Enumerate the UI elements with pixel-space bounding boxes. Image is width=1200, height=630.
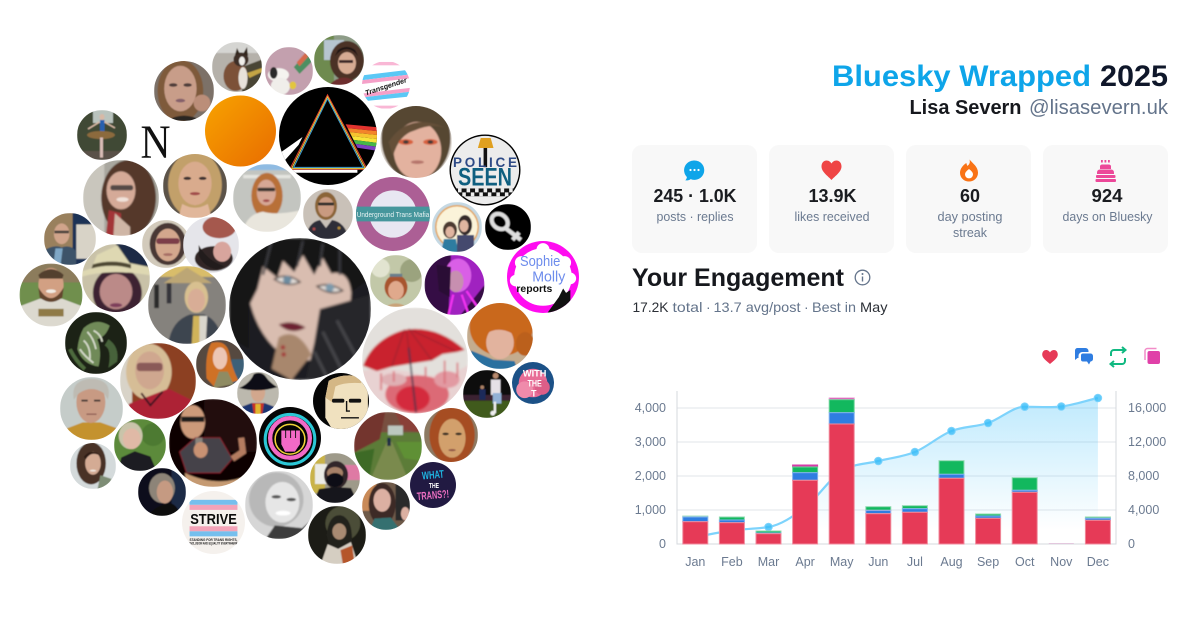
stat card: days on Bluesky: 924 — [1092, 186, 1122, 206]
legend icon: quotes — [1145, 348, 1160, 364]
icon: heart — [822, 160, 842, 180]
engagement summary: 13.7 avg/post — [714, 299, 801, 315]
left axis labels: 0 — [659, 537, 666, 551]
avatar: with the T logo: THE — [528, 378, 542, 388]
title: 2025 — [1100, 60, 1168, 93]
avatar: with the T logo: WITH — [523, 369, 546, 379]
avatar: transgender logo: Transgender — [364, 75, 409, 97]
avatar: red umbrella watercolor — [362, 308, 468, 414]
month labels: May — [830, 555, 854, 569]
avatar: sophie molly reports: Sophie — [520, 254, 560, 270]
avatar: woman red glasses — [142, 220, 190, 268]
avatar: strive logo: STANDING FOR TRANS RIGHTS, — [190, 538, 238, 542]
legend icon: replies — [1075, 348, 1093, 364]
avatar: sophie molly reports: reports — [516, 284, 553, 295]
avatar: man with glasses cartoon — [313, 373, 369, 429]
month labels: Aug — [940, 555, 963, 569]
right axis labels: 12,000 — [1128, 435, 1166, 449]
stat card: day posting streak — [906, 145, 1031, 253]
avatar: red hair outdoors — [370, 255, 423, 307]
right axis labels: 4,000 — [1128, 503, 1159, 517]
avatar: fist logo — [259, 407, 321, 469]
profile name and handle: Lisa Severn — [910, 97, 1022, 119]
left axis labels: 1,000 — [635, 503, 666, 517]
cumulative area — [695, 398, 1098, 544]
month labels: Jan — [685, 555, 705, 569]
bar: Mar — [756, 531, 781, 544]
avatar: purple portrait — [424, 255, 484, 315]
avatar: with the T logo — [512, 362, 554, 404]
avatar: blonde with greenery — [114, 419, 166, 471]
avatar: sophie molly reports: Molly — [532, 269, 566, 285]
avatar: man with newspaper — [44, 213, 96, 265]
avatar: lizard — [65, 312, 127, 374]
avatar: brown hair woman — [70, 442, 116, 489]
avatar: black and white portrait — [245, 471, 313, 539]
left axis labels: 2,000 — [635, 469, 666, 483]
chart legend — [1042, 347, 1160, 367]
avatar: N logo — [129, 116, 181, 169]
avatar: cat — [212, 42, 262, 92]
avatar: main profile woman with black fringe — [229, 238, 371, 380]
avatar: underground roundel: Underground Trans Mafia — [357, 210, 430, 219]
stat card: posts and replies: posts · replies — [656, 209, 734, 224]
right axis labels — [1128, 401, 1166, 551]
cumulative line — [695, 398, 1098, 537]
legend icon: reposts — [1110, 347, 1126, 367]
bar: May — [829, 398, 854, 544]
avatar: prism — [279, 87, 377, 185]
profile name and handle: @lisasevern.uk — [1029, 97, 1169, 119]
avatar: with the T logo: T — [531, 388, 537, 398]
month labels: Mar — [758, 555, 779, 569]
stat card: days on Bluesky — [1043, 145, 1168, 253]
avatar: what the trans logo — [410, 462, 456, 508]
avatar: two illustrated women — [432, 202, 482, 252]
line markers — [765, 394, 1102, 531]
legend icon: likes — [1042, 350, 1058, 364]
icon: info — [855, 270, 870, 285]
stat card: likes received: likes received — [794, 209, 870, 224]
avatar: older man — [60, 377, 123, 440]
avatar: sophie molly reports — [507, 241, 579, 313]
bar: Nov — [1049, 543, 1074, 544]
bar: Jan — [683, 516, 708, 544]
avatar: masked person — [310, 453, 360, 503]
engagement summary: Best in — [812, 299, 856, 315]
combo chart — [635, 391, 1166, 569]
month labels: Jun — [868, 555, 888, 569]
avatar: redhead — [196, 340, 244, 388]
icon: speech bubble — [684, 160, 704, 180]
avatar: bald man with microphone — [169, 399, 257, 487]
avatar: woman teal top — [362, 482, 410, 530]
avatar: orange gradient — [205, 96, 276, 166]
title: Bluesky Wrapped — [832, 60, 1091, 93]
bar: Jul — [902, 506, 927, 544]
left axis labels — [635, 401, 666, 551]
avatar: police seen logo: POLICE — [453, 155, 517, 170]
right axis labels: 16,000 — [1128, 401, 1166, 415]
icon: flame — [960, 160, 978, 182]
avatar: underground roundel — [356, 177, 430, 251]
avatar: red eyeshadow woman — [380, 106, 452, 178]
stat card: days on Bluesky: days on Bluesky — [1062, 209, 1153, 224]
engagement summary: · — [804, 299, 809, 315]
avatar: football player — [463, 370, 511, 418]
avatar: woman in floral top — [303, 189, 353, 239]
chart gridlines and axes — [677, 391, 1116, 544]
avatar: strive logo: INCLUSION AND EQUALITY EVERYWHERE — [190, 542, 237, 546]
avatar: dark portrait — [138, 468, 186, 516]
stat card: day posting streak: 60 — [960, 186, 980, 206]
right axis labels: 0 — [1128, 537, 1135, 551]
heading: your engagement: Your Engagement — [632, 264, 845, 292]
avatar: what the trans logo: TRANS?! — [416, 488, 450, 503]
engagement summary — [632, 299, 888, 315]
avatar: blonde woman — [163, 151, 227, 218]
month labels — [685, 555, 1109, 569]
avatar: tricorn hat man — [237, 372, 279, 414]
avatar: venus symbol — [485, 204, 531, 250]
avatar: orange-haired woman — [467, 298, 534, 369]
avatar: strive logo — [182, 491, 245, 554]
avatar: bearded man — [20, 264, 82, 326]
engagement summary: · — [706, 299, 711, 315]
month labels: Jul — [907, 555, 923, 569]
avatar: blonde at pyramid plaza — [148, 266, 226, 344]
stat card: day posting streak: streak — [953, 225, 987, 240]
avatar: hooded figure — [308, 506, 366, 564]
avatar: N logo: N — [140, 116, 170, 169]
month labels: Oct — [1015, 555, 1035, 569]
avatar: what the trans logo: THE — [429, 481, 439, 490]
avatar: green park — [354, 412, 422, 480]
avatar cluster — [20, 35, 579, 564]
engagement summary: 17.2K — [632, 299, 669, 315]
engagement summary: total — [672, 299, 702, 315]
avatar: transgender logo — [362, 61, 410, 109]
left axis labels: 3,000 — [635, 435, 666, 449]
bar: Dec — [1085, 517, 1110, 544]
right axis labels: 8,000 — [1128, 469, 1159, 483]
engagement summary: May — [860, 299, 888, 315]
avatar: what the trans logo: WHAT — [421, 469, 445, 483]
stat card: likes received: 13.9K — [808, 186, 856, 206]
left axis labels: 4,000 — [635, 401, 666, 415]
avatar: upside-down woman — [183, 216, 239, 273]
bar: Feb — [719, 517, 744, 544]
bar: Aug — [939, 461, 964, 544]
avatar: ballet dancer — [77, 110, 127, 160]
avatar: woman with auburn hair — [154, 60, 214, 122]
month labels: Feb — [721, 555, 743, 569]
month labels: Nov — [1050, 555, 1073, 569]
bar: Sep — [976, 514, 1001, 544]
avatar: older woman in red — [120, 343, 196, 419]
stat card: day posting streak: day posting — [938, 209, 1002, 224]
profile name and handle — [910, 97, 1169, 119]
bar: Jun — [866, 507, 891, 544]
avatar: red hair with glasses — [233, 164, 301, 232]
avatar: police seen logo: SEEN — [458, 165, 512, 192]
month labels: Dec — [1087, 555, 1109, 569]
stat card: posts and replies: 245 · 1.0K — [654, 186, 736, 206]
month labels: Apr — [795, 555, 815, 569]
stacked bars — [683, 398, 1110, 544]
bar: Oct — [1012, 478, 1037, 544]
avatar: glasses with dark fringe — [314, 35, 364, 85]
month labels: Sep — [977, 555, 999, 569]
avatar: red-haired woman — [424, 406, 478, 464]
avatar: woman in hat — [82, 244, 150, 319]
avatar: police seen logo — [450, 134, 520, 206]
stat card: posts and replies — [632, 145, 757, 253]
avatar: long hair with glasses — [83, 160, 159, 236]
avatar: strive logo: STRIVE — [190, 511, 237, 528]
bar: Apr — [793, 465, 818, 544]
avatar: snoopy — [265, 47, 313, 95]
icon: cake — [1096, 160, 1116, 182]
stat card: likes received — [769, 145, 894, 253]
